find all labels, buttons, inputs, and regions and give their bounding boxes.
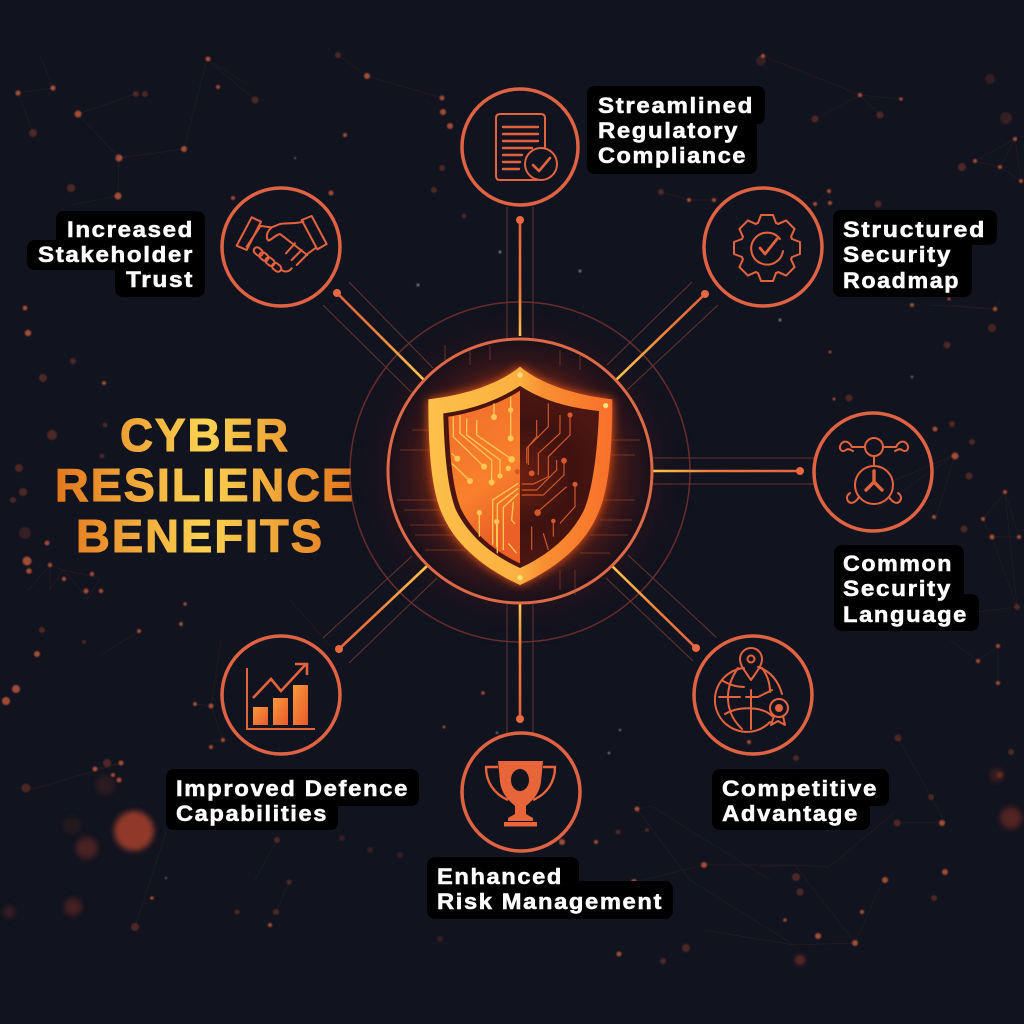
shield right half (520, 414, 582, 540)
shield rivets (517, 372, 608, 580)
label: enhanced risk management: Enhanced (437, 864, 563, 889)
node: enhanced risk management (462, 733, 580, 851)
label: structured security roadmap: Structured (843, 217, 986, 242)
faint circuit pattern around the shield (397, 345, 640, 595)
label: increased stakeholder trust: Increased (67, 217, 194, 242)
icon: document with check (496, 114, 557, 180)
label: improved defence capabilities: Improved Defence (176, 776, 409, 801)
icon: globe with pin and ribbon (715, 648, 788, 732)
label: enhanced risk management (427, 857, 673, 919)
label: streamlined regulatory compliance (587, 86, 765, 174)
shield band (428, 367, 612, 585)
node: improved defence capabilities (222, 636, 340, 754)
label: streamlined regulatory compliance: Streamlined (598, 93, 754, 118)
left circuit traces (452, 397, 518, 553)
label: common security language (834, 545, 979, 631)
node: structured security roadmap (704, 188, 822, 306)
label: enhanced risk management: Risk Management (437, 889, 663, 914)
connector: bottom right (606, 555, 716, 661)
label: competitive advantage: Advantage (722, 801, 859, 826)
label: common security language: Common (843, 551, 953, 576)
node: streamlined regulatory compliance (462, 89, 578, 205)
label: increased stakeholder trust (27, 211, 205, 297)
connector: top (507, 207, 533, 340)
shield dark edge (444, 387, 598, 567)
connector: right (652, 458, 816, 484)
title: BENEFITS (76, 510, 324, 562)
label: streamlined regulatory compliance: Regulatory (598, 118, 739, 143)
central shield emblem (388, 339, 652, 603)
node: increased stakeholder trust (222, 188, 340, 306)
label: improved defence capabilities (166, 769, 419, 830)
connector: bottom left (323, 556, 437, 663)
label: competitive advantage: Competitive (722, 776, 878, 801)
connector: top left (323, 282, 433, 392)
connector: bottom (507, 604, 533, 733)
label: increased stakeholder trust: Stakeholder (38, 242, 194, 267)
label: streamlined regulatory compliance: Compliance (598, 143, 747, 168)
title (55, 409, 355, 562)
icon: gear with check (734, 215, 800, 281)
label: common security language: Language (843, 602, 968, 627)
label: structured security roadmap: Roadmap (843, 268, 960, 293)
icon: handshake (237, 216, 327, 273)
node: competitive advantage (694, 636, 812, 754)
label: structured security roadmap (833, 210, 997, 297)
central halo and outer ring (346, 298, 694, 646)
label: improved defence capabilities: Capabilities (176, 801, 328, 826)
icon: linked figures (840, 438, 908, 504)
connector: top right (607, 282, 718, 390)
shield glow (428, 367, 612, 585)
label: structured security roadmap: Security (843, 242, 952, 267)
label: competitive advantage (712, 769, 889, 830)
right circuit traces (515, 403, 577, 550)
icon: growth bar chart (247, 664, 315, 729)
title: RESILIENCE (55, 459, 355, 511)
label: increased stakeholder trust: Trust (126, 267, 194, 292)
label: common security language: Security (843, 576, 952, 601)
icon: trophy (486, 761, 555, 826)
shield left half (448, 391, 520, 563)
title: CYBER (120, 409, 290, 461)
node: common security language (814, 413, 932, 531)
